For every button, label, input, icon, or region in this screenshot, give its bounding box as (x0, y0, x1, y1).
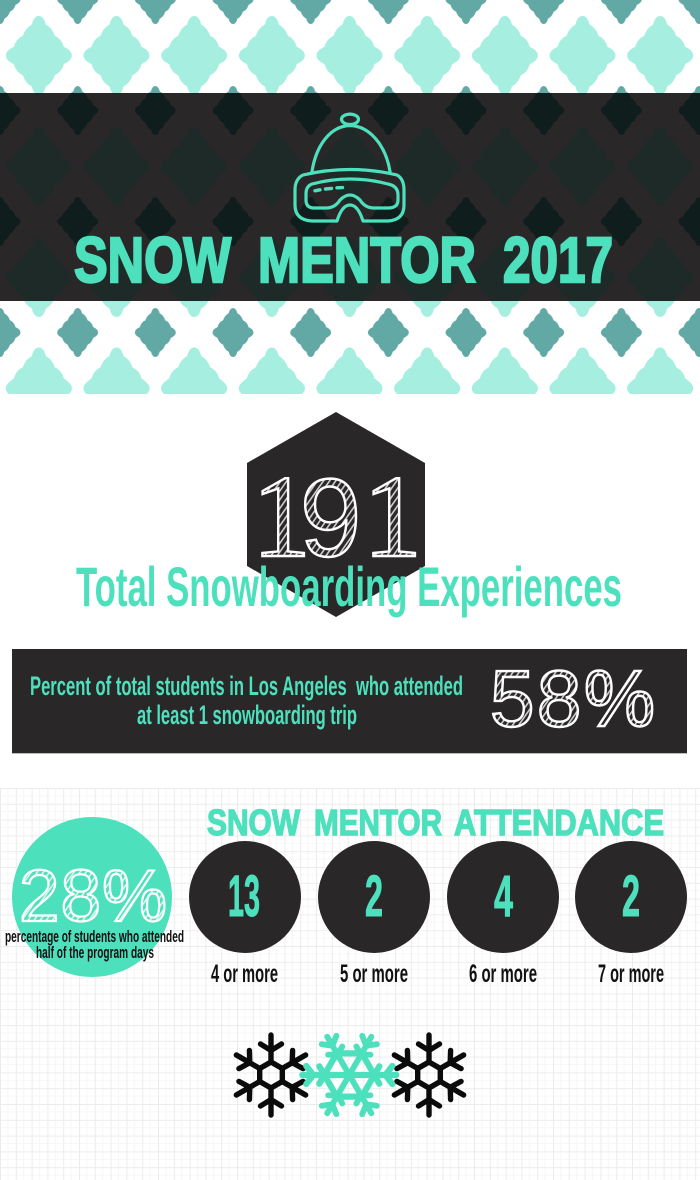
background pattern: snow diamonds (0, 0, 700, 394)
panel: percent of students (12, 649, 687, 754)
title: 2017 (503, 224, 613, 296)
big number 58%: 58% (490, 654, 655, 743)
big number 191: 9 (300, 457, 361, 580)
big number 191: 1 (252, 451, 311, 582)
icon: right snowflake (389, 1035, 469, 1115)
caption: half of the program days (36, 943, 154, 962)
heading: attendance: MENTOR (314, 802, 442, 843)
title (74, 224, 613, 296)
title: MENTOR (258, 224, 476, 296)
heading: attendance: ATTENDANCE (454, 802, 664, 843)
panel: total snowboarding experiences (76, 412, 622, 618)
stat: 4 (447, 841, 559, 988)
bar background (12, 649, 687, 753)
number 28%: 28% (19, 856, 167, 937)
stat: 2 (318, 841, 430, 988)
title: SNOW (74, 224, 231, 296)
stat: 4: 4 (494, 864, 513, 929)
heading: attendance (207, 802, 664, 843)
stat: 2: 2 (365, 864, 383, 929)
stat: 13: 13 (228, 864, 260, 929)
icon: center snowflake (302, 1033, 396, 1117)
banner background (0, 93, 700, 301)
stat: 13: 4 or more (211, 960, 278, 988)
stat: 2 (575, 841, 687, 988)
stat: 4: 6 or more (469, 960, 537, 988)
caption (5, 927, 184, 962)
stat: 2: 2 (622, 864, 640, 929)
hexagon (247, 412, 425, 617)
grid background (0, 788, 700, 1180)
stat: 2: 5 or more (340, 960, 408, 988)
heading: attendance: SNOW (207, 802, 300, 843)
icon: snowflakes (231, 1033, 469, 1117)
teal circle (12, 817, 172, 977)
panel: attendance section (0, 788, 700, 1180)
stat: 13 (189, 841, 301, 988)
icon: left snowflake (231, 1035, 311, 1115)
bar text: at least 1 snowboarding trip (137, 700, 357, 730)
callout: 28 percent (5, 817, 184, 977)
panel: title banner (0, 93, 700, 301)
icon: beanie with goggles (295, 114, 404, 221)
big number 191: 1 (363, 451, 422, 582)
bar text (30, 671, 463, 730)
caption: percentage of students who attended (5, 927, 184, 946)
